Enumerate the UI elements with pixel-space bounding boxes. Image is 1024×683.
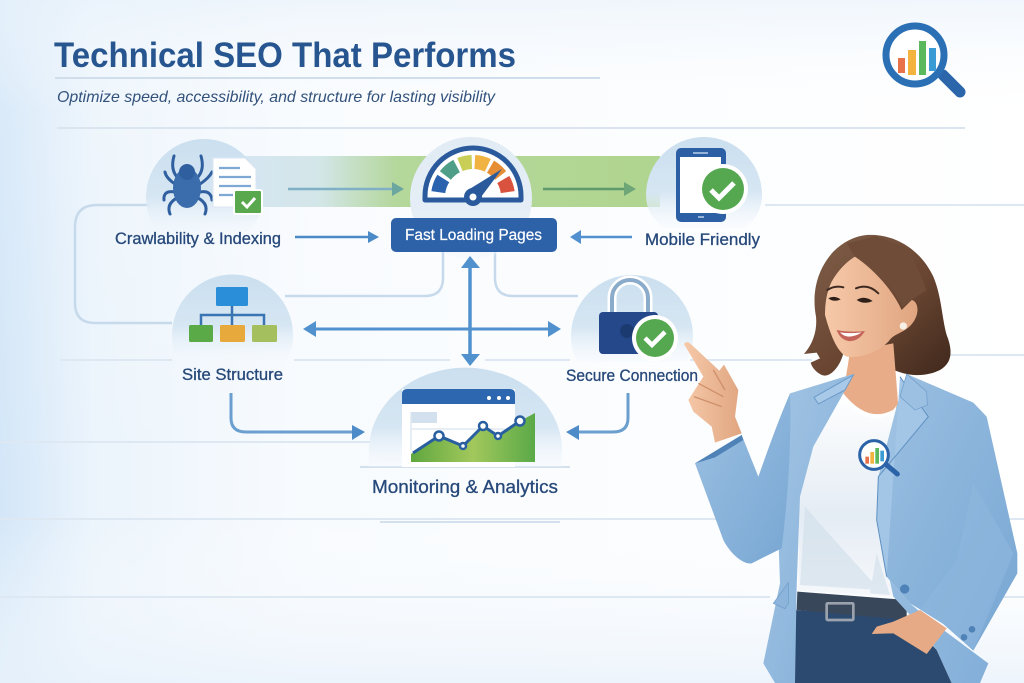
icon disc [410,137,532,259]
label: Monitoring & Analytics [372,477,558,497]
arrow: speed to mobile, on band [543,182,636,196]
icon disc [571,275,693,362]
arrow: site structure to monitoring [231,393,365,440]
arrow: crawlability to speed, on band [288,182,404,196]
label: Mobile Friendly [645,231,761,249]
trousers [775,610,952,683]
blazer: raised sleeve [695,393,790,563]
icon: analytics dashboard [402,389,535,467]
blazer: pocket flap [773,583,788,609]
node: monitoring and analytics [369,368,562,497]
green progress band [235,156,660,207]
t-shirt [798,393,897,597]
icon disc [146,139,262,235]
finger creases [694,370,725,407]
header divider [57,127,965,129]
icon: magnifier with bar chart logo [886,26,960,92]
node: fast loading pages [391,137,557,259]
icon: sitemap [189,287,277,342]
blazer: left lapel [814,375,853,404]
hand in pocket [872,610,947,654]
badge: magnifier logo on shirt [860,441,897,474]
lips [837,330,865,341]
presenter: woman pointing at the diagram [684,235,1017,683]
arrow: vertical double arrow [461,256,480,366]
blazer: right lapel [877,377,928,577]
subtitle: Optimize speed, accessibility, and structure for lasting visibility [57,89,496,106]
icon disc [369,368,562,467]
pointing hand [684,342,742,443]
arrow: crawlability label to speed box [295,231,379,243]
node: mobile friendly [645,137,762,249]
teeth [840,332,862,337]
label box: Fast Loading Pages [405,227,542,244]
label: Site Structure [182,366,283,384]
connector outlines [75,205,578,323]
icon: green check [698,164,748,214]
neck [843,343,898,414]
face [825,257,917,357]
hair: back [804,235,951,376]
icon: spider [164,156,212,214]
hair: crown and fringe [847,236,927,307]
earring [900,322,907,330]
icon: green check badge [234,190,262,214]
belt [797,592,907,620]
node: crawlability and indexing [115,139,281,248]
label: Secure Connection [566,367,698,385]
title: Technical SEO That Performs [54,36,516,75]
shirt fold shading [800,507,890,595]
blazer: collar notch [900,374,927,410]
node: secure connection [566,275,698,385]
eyes [828,297,873,303]
blazer: buttons [900,584,975,641]
arrow: mobile label to speed box [570,230,632,244]
icon: phone [676,148,726,222]
blazer: right front panel [877,374,988,683]
brows [827,287,878,293]
label box [391,218,557,252]
blazer: left front panel [763,374,853,683]
icon: green check [632,315,678,361]
icon disc [646,137,762,228]
icon disc [172,274,293,360]
arrow: secure connection to monitoring [566,393,628,440]
arrow: horizontal double arrow [303,321,561,337]
blazer: right body and arm [877,374,1017,651]
label: Crawlability & Indexing [115,230,281,248]
blazer: cuff opening [695,435,743,463]
node: site structure [172,274,293,384]
title rule [55,77,600,79]
blazer: sleeve shading [920,483,1013,650]
icon: padlock [599,280,658,354]
icon: speed gauge [425,148,521,206]
icon: document [213,158,256,207]
